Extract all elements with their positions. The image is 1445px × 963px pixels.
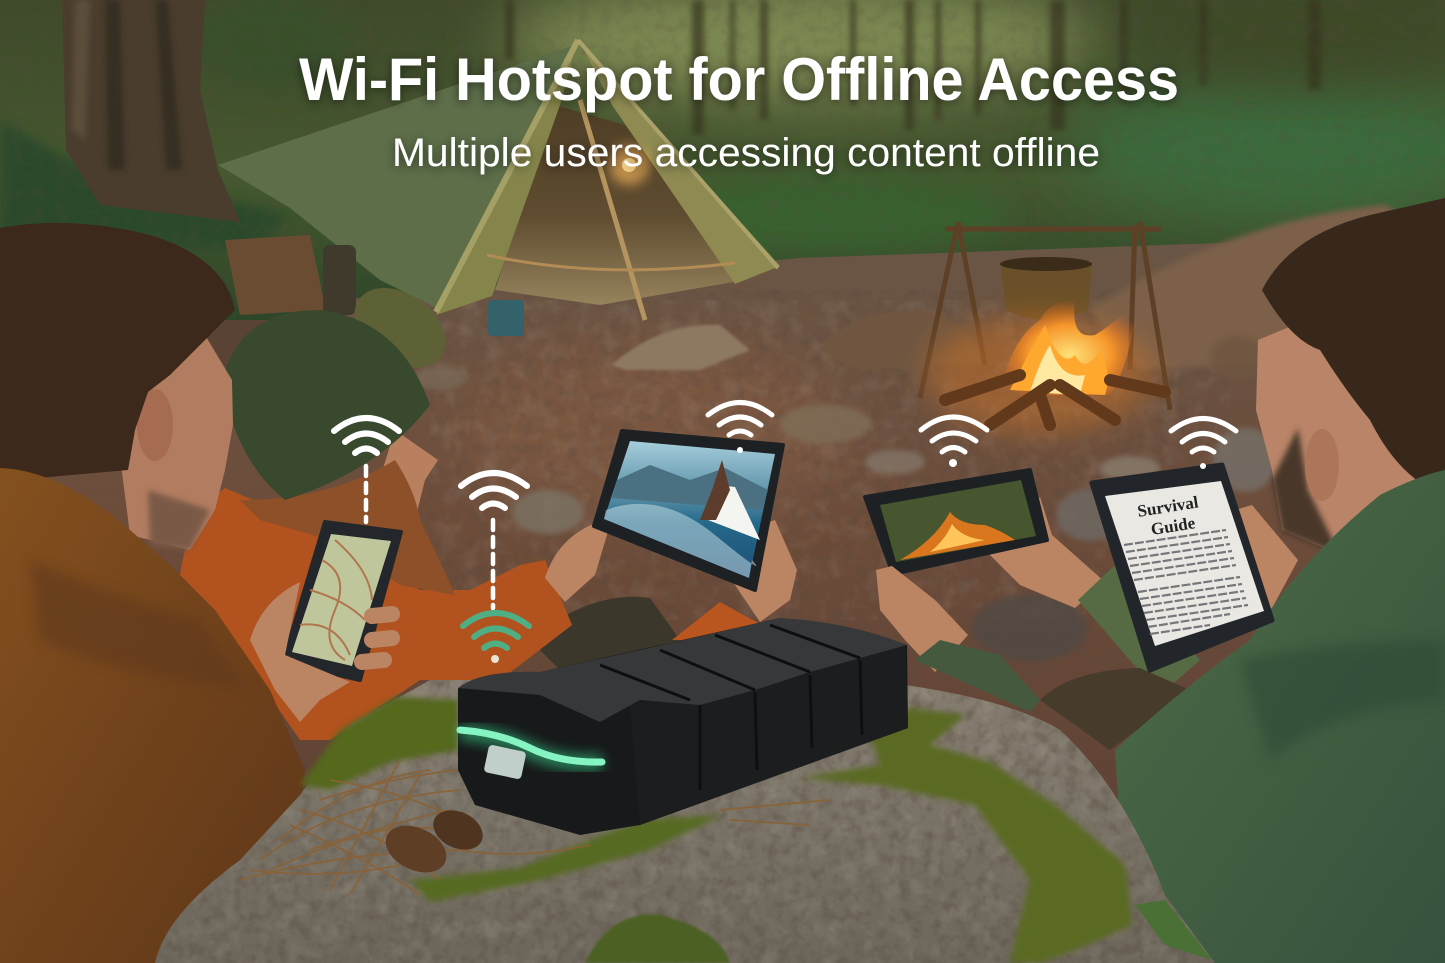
hand holding phone — [250, 582, 392, 722]
hair — [1262, 198, 1445, 495]
sleeve — [672, 602, 762, 640]
moss — [585, 915, 730, 963]
foreground rock — [155, 680, 1215, 963]
wifi icon above video phone — [921, 417, 987, 467]
fern — [1135, 900, 1212, 960]
side — [630, 645, 908, 825]
background boulder — [1090, 205, 1445, 370]
moss — [800, 708, 1132, 963]
face — [370, 430, 438, 520]
green wifi icon on device — [463, 613, 529, 663]
wifi icon above phone — [334, 418, 399, 522]
hand behind e-reader — [1235, 505, 1298, 612]
stone — [612, 325, 750, 370]
sleeve — [1078, 565, 1200, 695]
moss — [300, 697, 458, 790]
jacket — [1115, 470, 1445, 963]
dark trousers — [530, 597, 680, 670]
trousers — [1040, 668, 1190, 750]
ear — [137, 389, 173, 461]
moss — [410, 815, 722, 902]
basket — [225, 235, 326, 315]
green sack — [340, 271, 460, 385]
hair — [0, 223, 235, 482]
bottle — [323, 245, 356, 315]
wifi icon above tablet — [708, 402, 772, 453]
pine cones — [378, 816, 454, 882]
beanie — [222, 310, 430, 500]
phone with fire video — [865, 470, 1047, 574]
ear — [1305, 429, 1339, 501]
subtitle: Multiple users accessing content offline — [392, 131, 1100, 175]
pine needles — [240, 760, 830, 895]
e-reader with survival guide: Survival — [1136, 492, 1200, 521]
hotspot device — [458, 618, 908, 835]
cooking tripod and fire — [920, 222, 1170, 435]
hand holding tablet — [735, 520, 797, 622]
person: woman in orange jacket with beanie — [180, 310, 797, 740]
jacket — [180, 488, 572, 740]
title: Wi-Fi Hotspot for Offline Access — [299, 46, 1179, 113]
stone — [818, 310, 980, 370]
beard — [1272, 428, 1340, 555]
scattered stones — [414, 336, 1277, 662]
wifi icon above e-reader — [1171, 418, 1236, 469]
e-reader with survival guide: Guide — [1150, 513, 1197, 539]
sleeve — [915, 640, 1040, 712]
e-reader with survival guide — [1092, 465, 1272, 670]
hair — [240, 460, 455, 595]
phone with map — [283, 522, 401, 680]
jacket — [0, 468, 305, 963]
hand holding tablet — [545, 518, 612, 602]
wifi icon above device — [461, 473, 527, 608]
beard — [148, 490, 210, 550]
hand behind video phone — [985, 497, 1105, 608]
man on right — [915, 198, 1445, 963]
tablet with surfing video — [594, 431, 783, 590]
head — [100, 300, 233, 550]
head — [1256, 310, 1445, 555]
green LED strip — [460, 732, 602, 762]
hand holding phone — [876, 566, 968, 672]
tree trunk — [62, 0, 240, 222]
ground — [0, 235, 1445, 963]
port — [484, 744, 526, 780]
person: man on left in brown jacket — [0, 223, 305, 963]
top — [458, 618, 907, 722]
base — [458, 618, 908, 835]
tent — [218, 40, 780, 336]
background: forest — [0, 0, 1445, 320]
